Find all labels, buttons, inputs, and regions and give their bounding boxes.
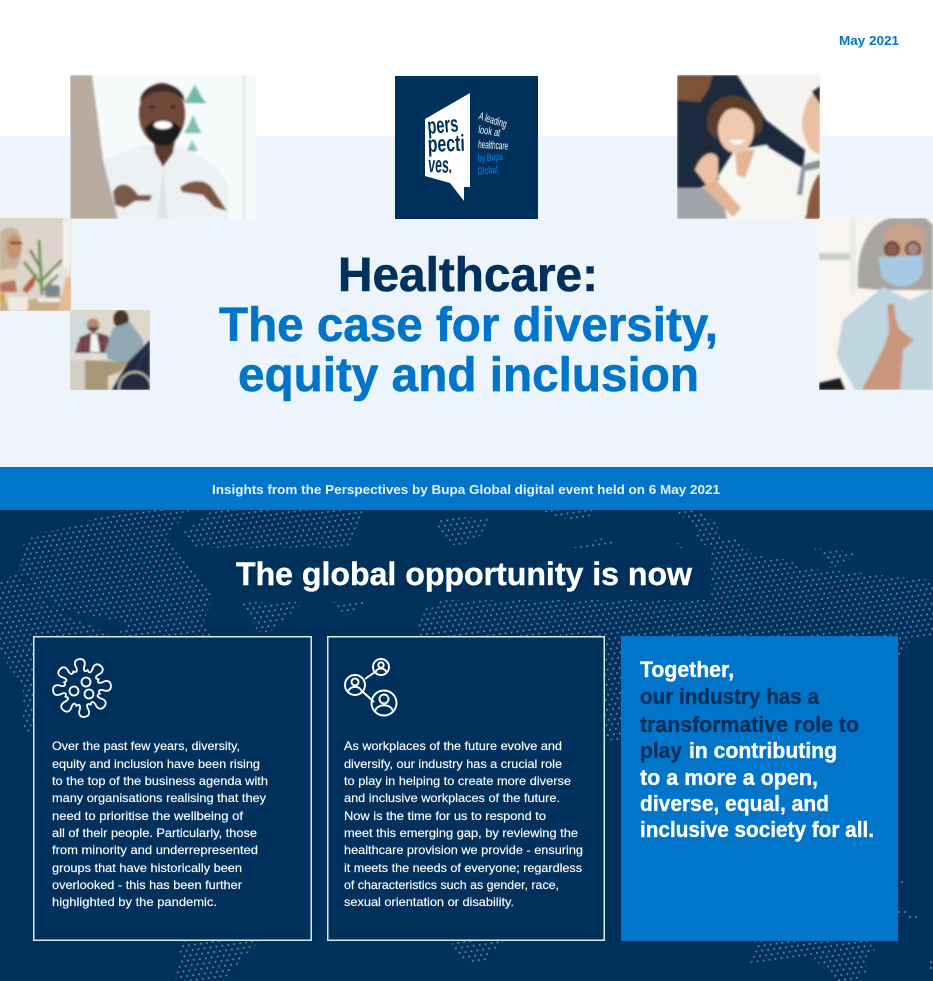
photo: two men, one in a wheelchair xyxy=(70,310,150,390)
body text: healthcare provision we provide - ensuring xyxy=(344,843,583,857)
icon: virus xyxy=(51,657,113,719)
logo tagline: healthcare xyxy=(478,139,508,153)
photo: woman in hijab at desk xyxy=(0,218,71,311)
body text: need to prioritise the wellbeing of xyxy=(52,809,244,823)
scattered map dots xyxy=(898,881,932,969)
body text: Now is the time for us to respond to xyxy=(344,809,546,823)
logo tagline: look at xyxy=(478,124,501,139)
body text: from minority and underrepresented xyxy=(52,843,258,857)
body text: diversify, our industry has a crucial role xyxy=(344,757,562,771)
photo: smiling woman with short hair xyxy=(677,75,820,219)
logo tagline: Global. xyxy=(477,164,500,178)
body text: Over the past few years, diversity, xyxy=(52,739,240,753)
card: the industry's crucial role xyxy=(328,637,604,940)
callout: together statement: inclusive society for all. xyxy=(640,817,874,842)
photo: smiling man in white shirt xyxy=(70,75,256,219)
body text: to play in helping to create more diverse xyxy=(344,774,571,788)
date: May 2021 xyxy=(839,33,899,48)
callout: together statement xyxy=(621,636,898,941)
title: equity and inclusion xyxy=(238,349,699,402)
photo: woman in glasses and face mask xyxy=(819,218,933,390)
dark section with dotted world map xyxy=(0,510,933,981)
callout: together statement: diverse, equal, and xyxy=(640,791,829,816)
icon: connected people xyxy=(345,659,396,716)
callout: together statement: to a more a open, xyxy=(640,765,818,790)
body text: of characteristics such as gender, race, xyxy=(344,878,559,892)
body text: meet this emerging gap, by reviewing the xyxy=(344,826,578,840)
logo wordmark: ves. xyxy=(428,151,453,178)
logo tagline xyxy=(477,110,508,178)
logo tagline: A leading xyxy=(477,110,508,131)
callout: together statement: play xyxy=(640,738,683,763)
body text xyxy=(52,739,268,909)
body text: As workplaces of the future evolve and xyxy=(344,739,562,753)
body text: and inclusive workplaces of the future. xyxy=(344,791,560,805)
body text: it meets the needs of everyone; regardless xyxy=(344,861,582,875)
header background band xyxy=(0,136,933,467)
body text: groups that have historically been xyxy=(52,861,242,875)
callout: together statement: Together, xyxy=(640,657,734,682)
title: Healthcare: xyxy=(338,249,598,302)
callout: together statement: in contributing xyxy=(689,738,837,763)
body text: equity and inclusion have been rising xyxy=(52,757,260,771)
body text: highlighted by the pandemic. xyxy=(52,895,217,909)
title: The case for diversity, xyxy=(219,299,718,352)
callout: together statement: our industry has a xyxy=(640,684,820,709)
body text: sexual orientation or disability. xyxy=(344,895,514,909)
subtitle band xyxy=(0,467,933,510)
logo tagline: by Bupa xyxy=(477,151,504,165)
section heading: The global opportunity is now xyxy=(236,556,692,592)
card: diversity rising on the agenda xyxy=(34,637,311,940)
callout: together statement: transformative role to xyxy=(640,712,859,737)
logo wordmark: pers xyxy=(426,110,459,139)
body text: to the top of the business agenda with xyxy=(52,774,268,788)
body text xyxy=(344,739,583,909)
logo speech bubble xyxy=(425,93,470,201)
body text: overlooked - this has been further xyxy=(52,878,242,892)
title xyxy=(219,249,718,402)
section heading xyxy=(214,548,711,600)
body text: many organisations realising that they xyxy=(52,791,266,805)
body text: all of their people. Particularly, those xyxy=(52,826,257,840)
logo panel: Perspectives by Bupa Global xyxy=(395,76,538,219)
subtitle band: Insights from the Perspectives by Bupa Global digital event held on 6 May 2021 xyxy=(212,482,720,497)
logo wordmark xyxy=(426,110,465,178)
faint map dots seen through the cards xyxy=(40,642,600,941)
logo wordmark: pecti xyxy=(427,130,465,157)
